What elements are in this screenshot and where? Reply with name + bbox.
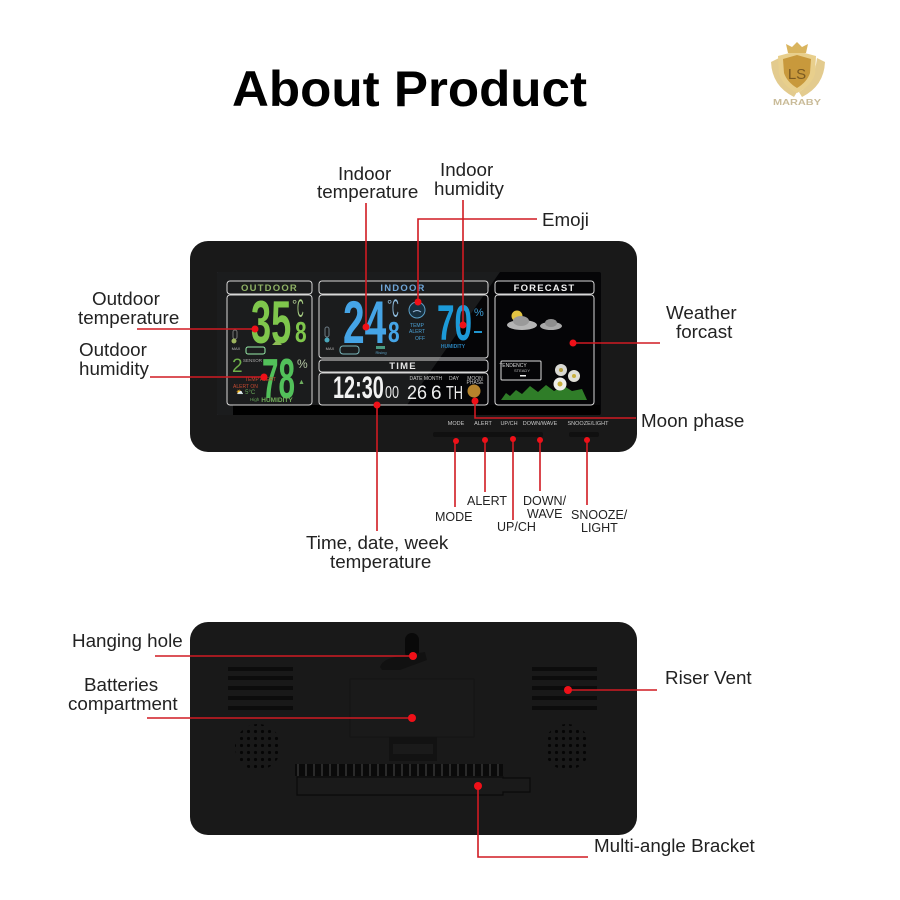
- panel: time and date: PHASE: [467, 380, 484, 386]
- title: About Product: [232, 61, 587, 117]
- indoor temperature digits: 24: [343, 288, 386, 356]
- panel: indoor readings: OFF: [415, 336, 425, 342]
- panel: outdoor readings: OUTDOOR: [241, 283, 298, 294]
- panel: outdoor readings: ALERT ON: [233, 384, 258, 390]
- callout: time, date, week: temperature: [330, 551, 431, 572]
- callout: multi-angle bracket: [474, 782, 756, 857]
- icon: gold crest logo: MARABY: [773, 98, 822, 107]
- panel: outdoor readings: SENSOR: [243, 358, 263, 363]
- hanging hole: [380, 633, 427, 670]
- right speaker holes: [544, 724, 590, 770]
- multi-angle bracket: [295, 764, 530, 795]
- callout: riser vent: [564, 667, 752, 694]
- emoji: [409, 302, 425, 318]
- callout: riser vent: Riser Vent: [665, 667, 752, 688]
- panel: time and date: MOON: [467, 376, 483, 382]
- icon: gold crest logo: [771, 42, 825, 107]
- panel: outdoor readings: ⛅ 5°C: [236, 389, 256, 396]
- callout: time, date, week: Time, date, week: [306, 532, 449, 553]
- callout: down/wave button: [523, 437, 567, 521]
- callout: multi-angle bracket: Multi-angle Bracket: [594, 835, 756, 856]
- callout: down/wave button: WAVE: [527, 507, 562, 521]
- callout: alert button: [467, 437, 507, 508]
- callout: indoor humidity: humidity: [434, 178, 505, 199]
- indoor humidity digits: 70: [437, 295, 472, 351]
- date digits: 26: [407, 383, 427, 404]
- callout: indoor humidity: [434, 159, 505, 328]
- callout: emoji: Emoji: [542, 209, 589, 230]
- callout: weather forecast: Weather: [666, 302, 737, 323]
- panel: front of weather station: [190, 241, 637, 452]
- icon: gold crest logo: LS: [788, 66, 806, 83]
- outdoor humidity digits: 78: [262, 347, 295, 411]
- panel: indoor readings: HUMIDITY: [441, 344, 466, 350]
- panel: indoor readings: C: [392, 294, 399, 322]
- callout: moon phase: [472, 398, 744, 431]
- callout: outdoor humidity: [79, 339, 268, 380]
- callout: up/ch button: UP/CH: [497, 520, 536, 534]
- buttons: DOWN/WAVE: [523, 421, 558, 427]
- panel: time and date: DAY: [449, 376, 460, 382]
- tendency box: STEADY: [514, 368, 530, 373]
- buttons: UP/CH: [500, 421, 518, 427]
- panel: indoor readings: TEMP: [410, 323, 425, 329]
- panel: indoor readings: INDOOR: [380, 283, 426, 294]
- panel: time and date: 00: [385, 383, 399, 403]
- panel: outdoor readings: 2: [232, 356, 243, 377]
- panel: indoor readings: MAX: [326, 346, 335, 351]
- panel: outdoor readings: MAX: [232, 346, 241, 351]
- callout: outdoor humidity: Outdoor: [79, 339, 147, 360]
- callout: moon phase: Moon phase: [641, 410, 744, 431]
- callout: batteries compartment: [68, 674, 416, 722]
- panel: time and date: TH: [446, 383, 463, 403]
- panel: indoor readings: °: [387, 297, 392, 312]
- callout: indoor humidity: Indoor: [440, 159, 493, 180]
- panel: outdoor readings: HUMIDITY: [261, 397, 293, 404]
- panel: outdoor readings: High: [250, 397, 260, 402]
- callout: indoor temperature: Indoor: [338, 163, 391, 184]
- callout: weather forecast: forcast: [676, 321, 733, 342]
- panel: indoor readings: [319, 281, 488, 358]
- panel: indoor readings: %: [474, 307, 484, 319]
- panel: time and date: DATE: [410, 376, 423, 382]
- callout: snooze/light button: [571, 437, 628, 535]
- panel: forecast: FORECAST: [514, 283, 575, 294]
- callout: hanging hole: Hanging hole: [72, 630, 183, 651]
- moon icon: [468, 384, 480, 398]
- right vent: [532, 667, 597, 710]
- panel: outdoor readings: C: [297, 294, 304, 322]
- panel: time and date: [319, 360, 488, 405]
- callout: emoji: [414, 209, 589, 306]
- left speaker holes: [235, 724, 281, 770]
- outdoor temperature digits: 35: [251, 288, 291, 356]
- tendency box: [499, 361, 541, 380]
- callout: outdoor temperature: temperature: [78, 307, 179, 328]
- left vent: [228, 667, 293, 710]
- buttons: SNOOZE/LIGHT: [568, 421, 609, 427]
- clock digits: 12:30: [333, 369, 384, 405]
- panel: outdoor readings: TEMP ALERT: [245, 377, 276, 383]
- panel: forecast: [495, 281, 594, 405]
- callout: snooze/light button: LIGHT: [581, 521, 618, 535]
- panel: time and date: TIME: [389, 361, 417, 372]
- callout: snooze/light button: SNOOZE/: [571, 508, 628, 522]
- callout: alert button: ALERT: [467, 494, 507, 508]
- panel: indoor readings: ALERT: [409, 329, 425, 335]
- buttons: [433, 421, 609, 437]
- callout: outdoor temperature: Outdoor: [92, 288, 160, 309]
- callout: batteries compartment: Batteries: [84, 674, 158, 695]
- icon: grass and flowers: [501, 364, 587, 400]
- callout: weather forecast: [570, 302, 737, 346]
- callout: outdoor humidity: humidity: [79, 358, 150, 379]
- callout: up/ch button: [497, 436, 536, 534]
- callout: time, date, week: [306, 402, 449, 572]
- panel: back of weather station: [190, 622, 637, 835]
- callout: mode button: [435, 438, 472, 524]
- callout: hanging hole: [72, 630, 417, 660]
- buttons: MODE: [448, 421, 465, 427]
- callout: batteries compartment: compartment: [68, 693, 178, 714]
- callout: outdoor temperature: [78, 288, 258, 332]
- callout: indoor temperature: temperature: [317, 181, 418, 202]
- screen: [217, 272, 601, 415]
- panel: indoor readings: 8: [388, 317, 400, 349]
- tendency box: TENDENCY: [499, 363, 527, 369]
- callout: mode button: MODE: [435, 510, 472, 524]
- callout: down/wave button: DOWN/: [523, 494, 567, 508]
- panel: indoor readings: Rising: [375, 350, 387, 355]
- panel: outdoor readings: 8: [295, 317, 307, 349]
- battery compartment: [350, 679, 474, 761]
- panel: outdoor readings: °: [292, 297, 297, 312]
- panel: time and date: 6: [431, 383, 442, 404]
- panel: outdoor readings: %: [297, 357, 308, 371]
- panel: time and date: MONTH: [424, 376, 443, 382]
- panel: outdoor readings: ▲: [298, 379, 305, 386]
- buttons: ALERT: [474, 421, 492, 427]
- callout: indoor temperature: [317, 163, 418, 330]
- icon: sun and clouds: [507, 310, 562, 330]
- panel: outdoor readings: [227, 281, 312, 411]
